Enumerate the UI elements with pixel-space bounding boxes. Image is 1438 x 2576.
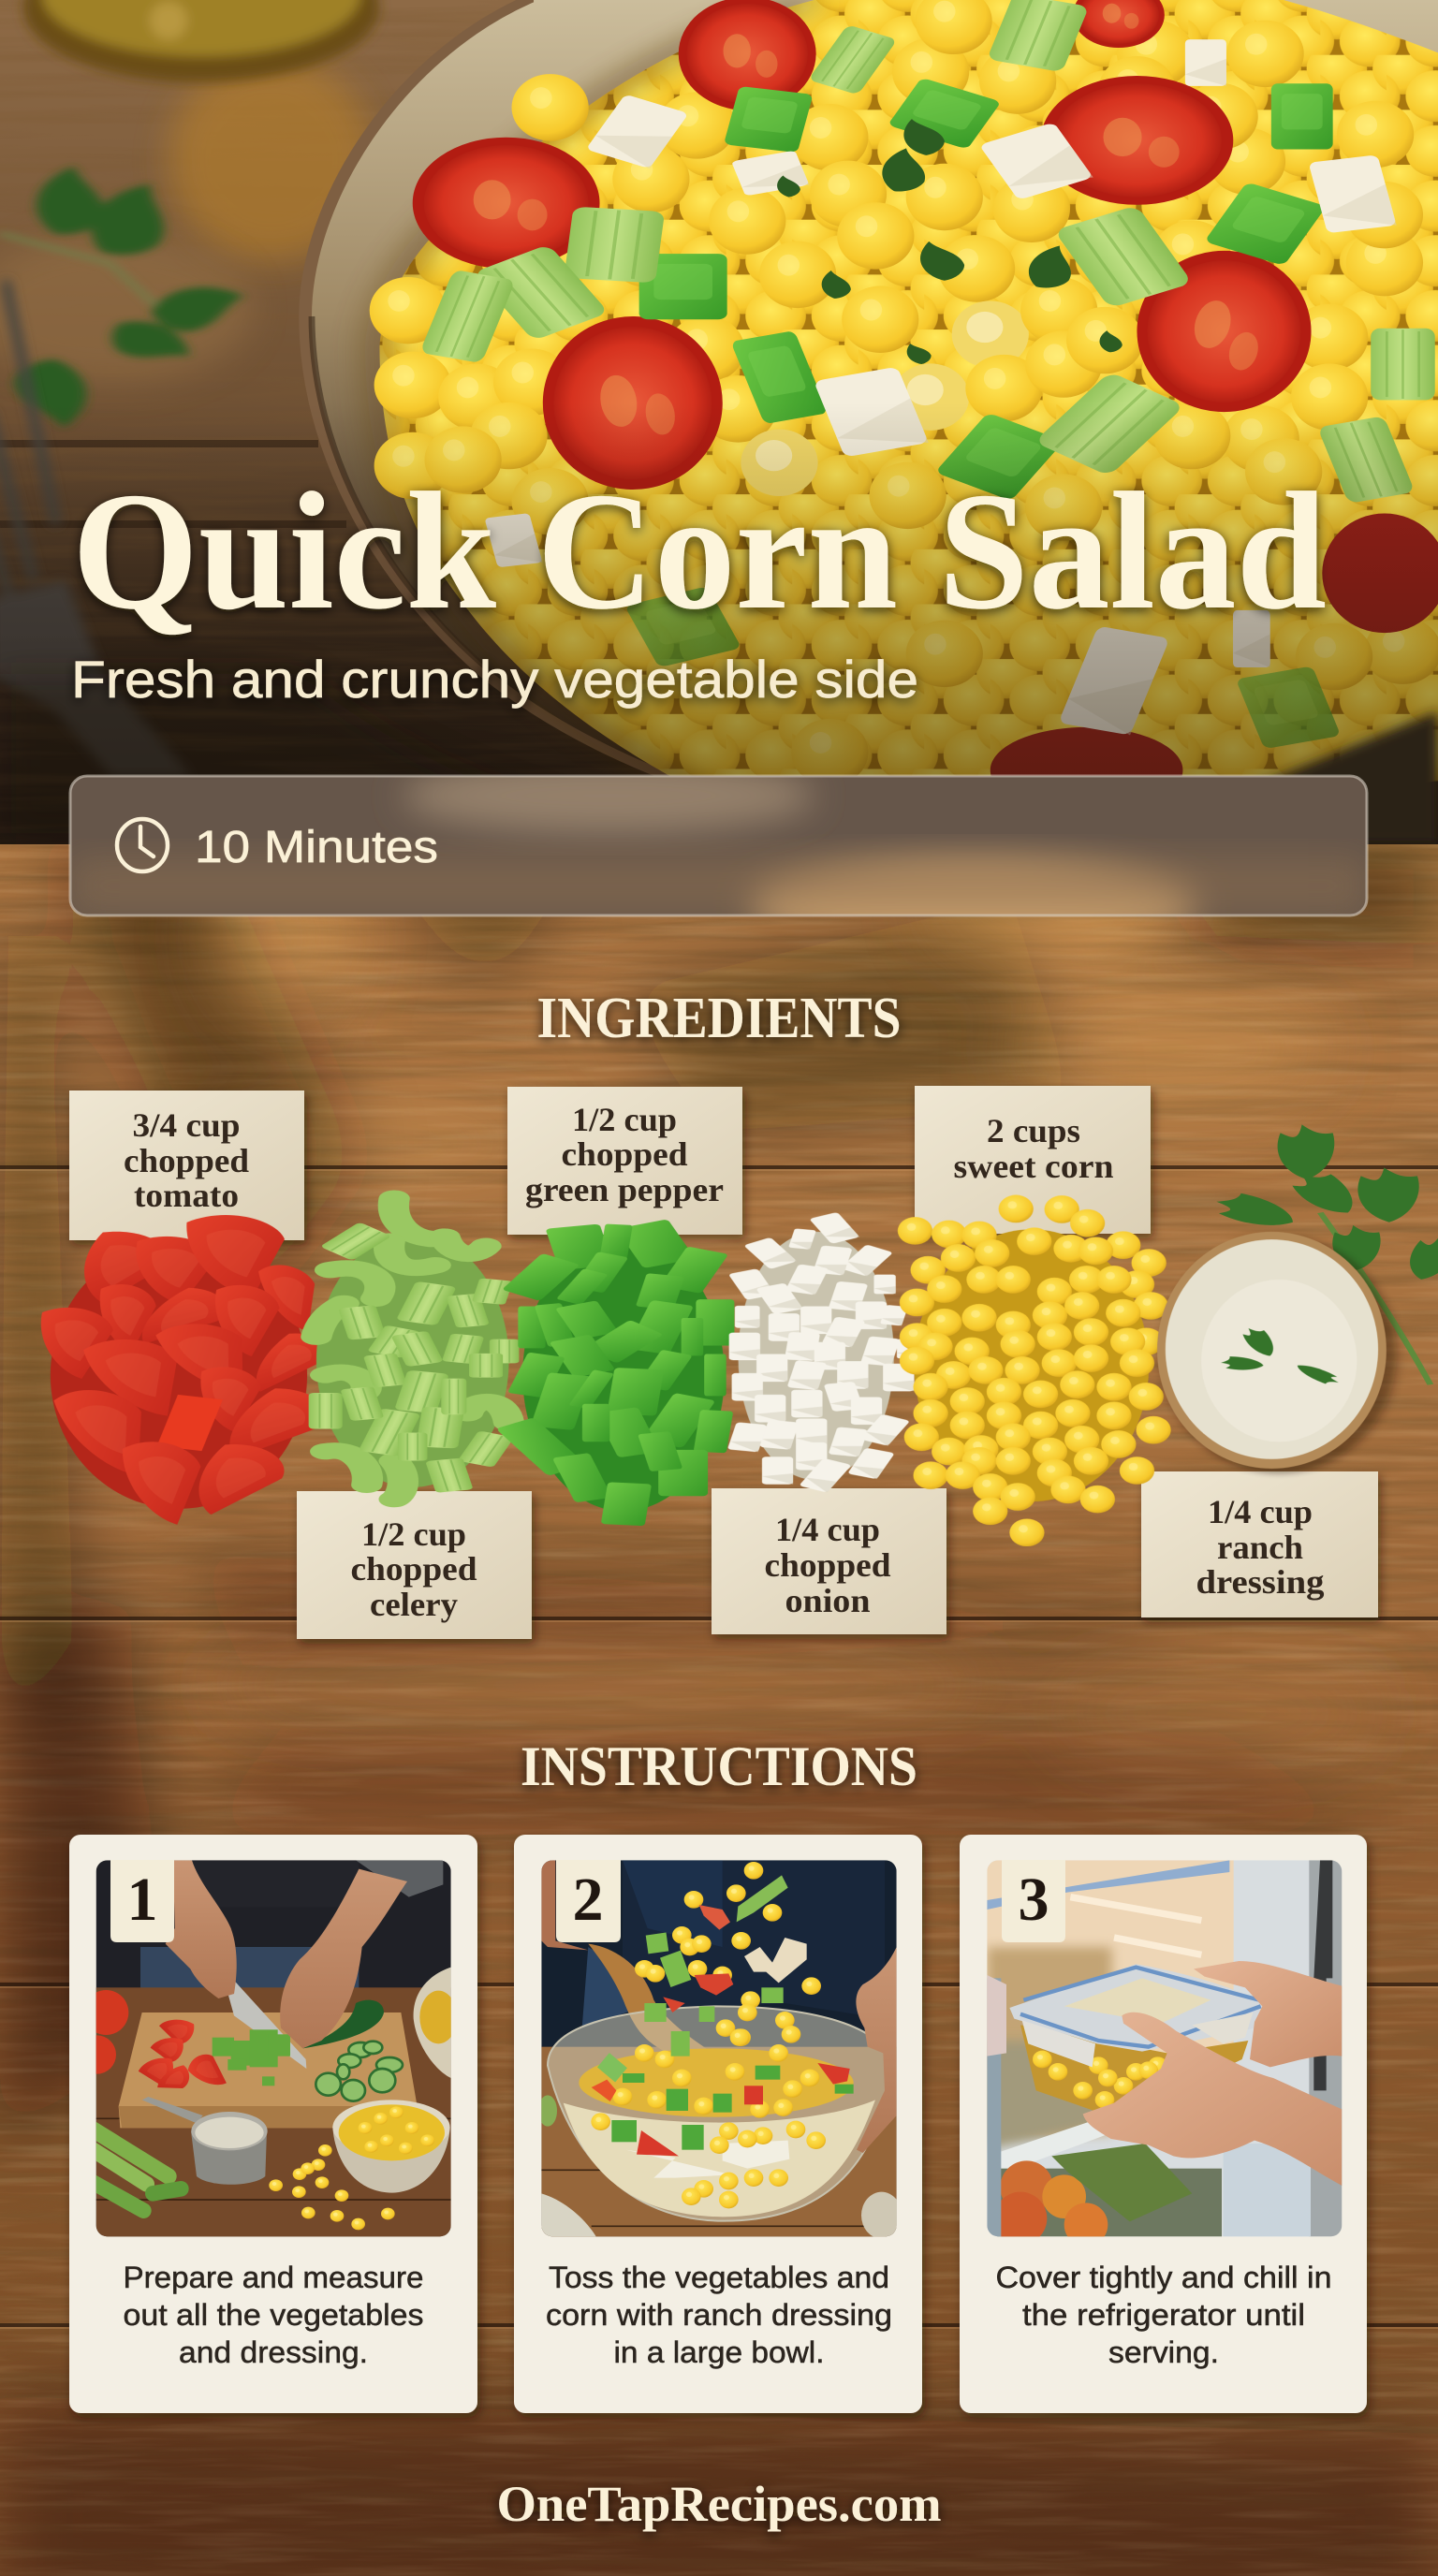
- step number badge 1: [110, 1860, 174, 1942]
- step 3 text: Cover tightly and chill in: [996, 2261, 1331, 2294]
- step 3 text: serving.: [1108, 2335, 1219, 2369]
- label card: ranch dressing: [1141, 1471, 1378, 1617]
- corn kernels: [370, 0, 1438, 785]
- hero photo: corn salad bowl on a wooden table: [0, 0, 1438, 844]
- step 2 text: [546, 2261, 892, 2369]
- heading: ingredients: INGREDIENTS: [537, 987, 901, 1050]
- step number badge 3: 3: [1019, 1866, 1049, 1934]
- tomatoes and wedges: [83, 1990, 128, 2035]
- step number badge 1: 1: [127, 1866, 157, 1934]
- step 2 text: Toss the vegetables and: [549, 2261, 889, 2294]
- celery pile: [309, 1198, 519, 1500]
- parsley sprig: [0, 162, 252, 428]
- step card 1: [69, 1835, 477, 2413]
- step 2 photo: tossing salad: [538, 1860, 902, 2239]
- label card: celery: celery: [370, 1586, 458, 1623]
- step 1 text: Prepare and measure: [124, 2261, 423, 2294]
- label card: ranch dressing: ranch: [1217, 1529, 1303, 1566]
- label card: onion: [712, 1488, 946, 1634]
- wooden spoon: [588, 1944, 713, 2056]
- hands: [1194, 1961, 1342, 2067]
- label card: celery: [297, 1491, 532, 1639]
- prep time text: 10 Minutes: [195, 823, 438, 872]
- food container: [1020, 2025, 1248, 2113]
- tomato pile: [41, 1212, 345, 1527]
- step number badge 3: [1002, 1860, 1065, 1942]
- onions: [484, 39, 1397, 736]
- label card: tomato: chopped: [124, 1142, 249, 1179]
- label card: green pepper: 1/2 cup: [572, 1101, 677, 1138]
- fork: [0, 281, 192, 777]
- salad base: corn: [379, 0, 1438, 800]
- measuring cup: [142, 2097, 203, 2123]
- chopped green: [213, 2029, 290, 2086]
- bowls of corn: [414, 1968, 451, 2078]
- step 2 text: corn with ranch dressing: [546, 2298, 892, 2332]
- label card: sweet corn: sweet corn: [953, 1148, 1114, 1185]
- step 1 text: [124, 2261, 423, 2369]
- label card: celery: chopped: [350, 1550, 477, 1588]
- step 1 text: out all the vegetables: [124, 2298, 423, 2332]
- ceramic bowl: [305, 0, 1438, 813]
- step 2 text: in a large bowl.: [614, 2335, 824, 2369]
- step 3 photo: chilling in refrigerator: [987, 1860, 1342, 2247]
- ingredient food layout: [41, 1124, 1438, 1546]
- knife: [227, 1973, 306, 2069]
- label card: tomato: 3/4 cup: [133, 1106, 240, 1144]
- side items: [861, 2192, 902, 2239]
- label card: green pepper: green pepper: [525, 1171, 724, 1208]
- scattered corn: [269, 2144, 395, 2230]
- label card: green pepper: chopped: [562, 1135, 687, 1173]
- step 1 photo: chopping vegetables: [78, 1860, 457, 2237]
- step 1 text: and dressing.: [179, 2335, 368, 2369]
- celery: [419, 0, 1435, 504]
- step number badge 2: 2: [573, 1866, 603, 1934]
- green peppers: [624, 78, 1341, 749]
- heading: instructions: INSTRUCTIONS: [521, 1735, 917, 1797]
- label card: onion: chopped: [764, 1546, 891, 1584]
- step 3 text: the refrigerator until: [1022, 2298, 1305, 2332]
- cutting board: [119, 2012, 417, 2128]
- onion pile: [727, 1212, 918, 1493]
- label card: green pepper: [507, 1087, 742, 1235]
- step number badge 2: [556, 1860, 621, 1942]
- label card: sweet corn: 2 cups: [987, 1112, 1080, 1149]
- glass bowl: [548, 2006, 889, 2221]
- label card: tomato: tomato: [134, 1177, 239, 1214]
- step card 3: [960, 1835, 1367, 2413]
- step 3 text: [996, 2261, 1331, 2369]
- label card: tomato: [69, 1090, 304, 1240]
- celery stalks: [91, 2128, 181, 2211]
- tomatoes: [413, 0, 1438, 813]
- wood table background: [0, 833, 1438, 2576]
- label card: celery: 1/2 cup: [361, 1515, 466, 1553]
- step card 2: [514, 1835, 922, 2413]
- title: Quick Corn Salad: [72, 458, 1327, 644]
- subtitle: Fresh and crunchy vegetable side: [71, 650, 918, 709]
- glass jar: [23, 0, 379, 82]
- ranch dressing bowl: [1157, 1232, 1397, 1473]
- label card: ranch dressing: 1/4 cup: [1208, 1493, 1313, 1530]
- falling salad: [635, 1862, 821, 2046]
- parsley: [1206, 1124, 1438, 1384]
- label card: ranch dressing: dressing: [1196, 1563, 1324, 1601]
- sweet corn pile: [898, 1195, 1171, 1546]
- right hand: [856, 1947, 897, 2153]
- label card: onion: onion: [785, 1582, 871, 1619]
- panel: prep time: [70, 758, 1367, 946]
- footer website: OneTapRecipes.com: [496, 2476, 942, 2532]
- label card: onion: 1/4 cup: [775, 1511, 880, 1548]
- herb garnish: [776, 116, 1123, 366]
- green pepper pile: [495, 1219, 734, 1526]
- cucumbers: [302, 2000, 384, 2048]
- salad pieces in bowl: [591, 2028, 826, 2208]
- icon: clock: [117, 819, 168, 871]
- label card: sweet corn: [915, 1086, 1151, 1234]
- arms and hands: [166, 1860, 237, 1998]
